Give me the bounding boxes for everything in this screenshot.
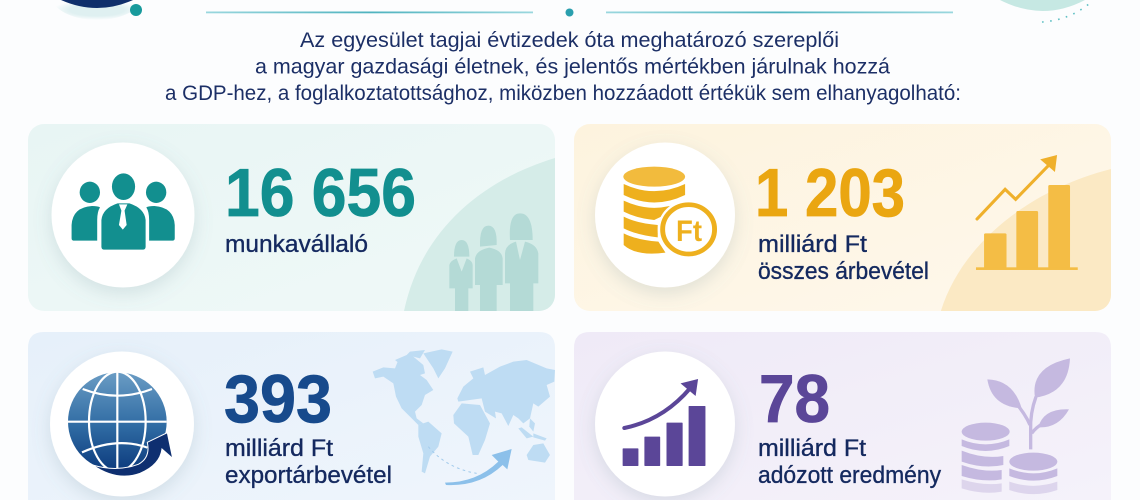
label: net profit: adózott eredmény	[758, 462, 941, 489]
currency mark: Ft	[676, 215, 702, 248]
stat: 78: 78	[759, 361, 830, 437]
icon: growth chart	[595, 352, 735, 496]
label: total revenue	[758, 231, 929, 285]
label: total revenue: összes árbevétel	[758, 258, 929, 285]
title divider	[206, 8, 953, 16]
icon: globe with arrow	[50, 352, 194, 496]
stat: 16 656: 16 656	[225, 155, 416, 231]
logo fragment: top left	[52, 0, 142, 20]
intro text: a magyar gazdasági életnek, és jelentős mértékben járulnak hozzá	[255, 56, 890, 78]
panel: total revenue	[574, 124, 1114, 313]
intro text: a GDP-hez, a foglalkoztatottsághoz, miközben hozzáadott értékük sem elhanyagolható:	[165, 82, 961, 105]
world map	[373, 349, 555, 485]
label: net profit: milliárd Ft	[758, 435, 866, 462]
label: total revenue: milliárd Ft	[758, 231, 867, 258]
shipping route	[428, 447, 477, 473]
label: munkavállaló: munkavállaló	[225, 231, 368, 258]
intro text: Az egyesület tagjai évtizedek óta meghatározó szereplői	[300, 29, 839, 52]
panel: export revenue	[28, 332, 555, 500]
intro text	[165, 29, 961, 105]
panel: net profit	[574, 332, 1111, 500]
stat: 393: 393	[224, 361, 332, 437]
plant and coins	[962, 358, 1070, 494]
decorative circle: top right	[1000, 0, 1090, 22]
label: export revenue: exportárbevétel	[225, 462, 392, 489]
panel: employees	[28, 124, 555, 312]
background figures	[404, 158, 555, 312]
label: export revenue: milliárd Ft	[225, 435, 333, 462]
icon: coins with Ft	[595, 142, 735, 288]
label: net profit	[758, 435, 941, 489]
background chart	[940, 155, 1114, 313]
export arrow	[445, 449, 512, 485]
label: export revenue	[225, 435, 392, 489]
icon: people	[52, 142, 194, 288]
stat: 1 203: 1 203	[755, 155, 905, 231]
